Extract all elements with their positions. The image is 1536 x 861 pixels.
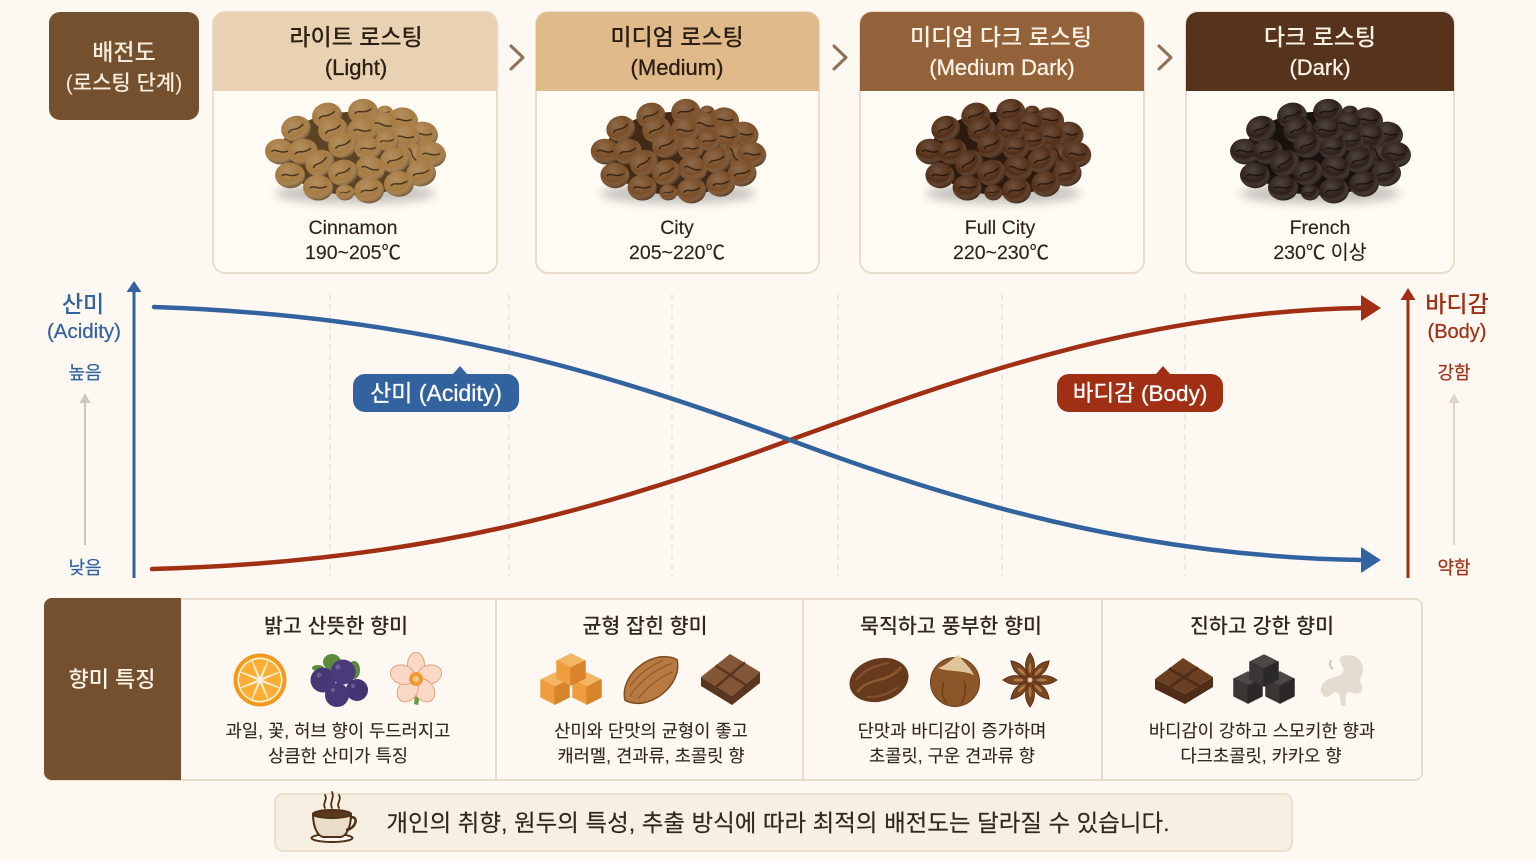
beans: light bbox=[263, 98, 448, 205]
icon: almond bbox=[614, 645, 688, 715]
row label: roasting stage bbox=[49, 12, 199, 120]
left axis: acidity: 산미 bbox=[62, 291, 104, 317]
flavor column 3: 단맛과 바디감이 증가하며 bbox=[858, 721, 1046, 741]
card: dark roast: (Dark) bbox=[1289, 55, 1351, 80]
card: medium dark roast: 220~230℃ bbox=[953, 242, 1049, 264]
flavor column 2: 산미와 단맛의 균형이 좋고 bbox=[554, 721, 748, 741]
icon: dark cubes bbox=[1234, 655, 1294, 703]
card: medium dark roast: (Medium Dark) bbox=[929, 55, 1075, 80]
beans: medium dark bbox=[914, 98, 1093, 205]
right axis: body bbox=[1400, 288, 1489, 578]
flavor column 2 bbox=[541, 615, 760, 766]
right axis: body: (Body) bbox=[1428, 321, 1486, 343]
flavor column 3 bbox=[844, 615, 1057, 766]
icon: hazelnut bbox=[930, 655, 980, 706]
callout: acidity bbox=[353, 366, 519, 412]
card: dark roast: French bbox=[1290, 217, 1350, 239]
row label: roasting stage: (로스팅 단계) bbox=[66, 72, 182, 95]
card: medium roast: (Medium) bbox=[631, 55, 723, 80]
card: dark roast: 다크 로스팅 bbox=[1264, 24, 1376, 50]
card: medium dark roast: 미디엄 다크 로스팅 bbox=[910, 24, 1092, 50]
callout: acidity: 산미 (Acidity) bbox=[370, 380, 502, 406]
flavor column 3: 초콜릿, 구운 견과류 향 bbox=[869, 746, 1035, 766]
flavor column 2: 캐러멜, 견과류, 초콜릿 향 bbox=[557, 746, 745, 766]
callout: body bbox=[1057, 366, 1223, 412]
flavor column 1: 과일, 꽃, 허브 향이 두드러지고 bbox=[226, 721, 450, 741]
icon: roasted bean bbox=[844, 651, 914, 709]
card: medium dark roast bbox=[860, 12, 1144, 273]
flavor column 4: 바디감이 강하고 스모키한 향과 bbox=[1149, 721, 1375, 741]
callout: body: 바디감 (Body) bbox=[1073, 381, 1207, 406]
icon: flower bbox=[388, 652, 444, 706]
card: light roast: Cinnamon bbox=[309, 217, 397, 239]
icon: chocolate bar bbox=[701, 654, 760, 705]
left axis: acidity: 낮음 bbox=[68, 558, 102, 578]
chevron 2 bbox=[834, 46, 846, 69]
flavor column 1: 상큼한 산미가 특징 bbox=[268, 746, 408, 766]
chevron 1 bbox=[511, 46, 523, 69]
footer note: 개인의 취향, 원두의 특성, 추출 방식에 따라 최적의 배전도는 달라질 수 있습니다. bbox=[386, 810, 1170, 836]
flavor column 4 bbox=[1149, 615, 1375, 766]
flavor column 4: 다크초콜릿, 카카오 향 bbox=[1180, 746, 1342, 766]
right axis: body: 바디감 bbox=[1425, 291, 1489, 317]
panel: flavor characteristics: 향미 특징 bbox=[68, 667, 156, 692]
icon: blueberries bbox=[310, 654, 368, 707]
flavor column 1 bbox=[226, 615, 450, 766]
body curve bbox=[152, 295, 1381, 569]
chevron 3 bbox=[1159, 46, 1171, 69]
icon: coffee cup bbox=[312, 792, 356, 842]
card: medium dark roast: Full City bbox=[965, 217, 1035, 239]
flavor column 4: 진하고 강한 향미 bbox=[1190, 615, 1334, 638]
flavor column 3: 묵직하고 풍부한 향미 bbox=[860, 615, 1042, 638]
card: light roast: 190~205℃ bbox=[305, 242, 401, 264]
beans: dark bbox=[1228, 98, 1413, 205]
right axis: body: 강함 bbox=[1437, 363, 1471, 383]
icon: orange slice bbox=[234, 654, 286, 706]
card: light roast: (Light) bbox=[325, 55, 387, 80]
flavor column 1: 밝고 산뜻한 향미 bbox=[264, 615, 408, 638]
card: dark roast bbox=[1186, 12, 1454, 273]
footer note bbox=[275, 792, 1292, 851]
beans: medium bbox=[589, 98, 768, 205]
icon: dark chocolate bbox=[1155, 658, 1213, 704]
card: medium roast bbox=[536, 12, 819, 273]
card: dark roast: 230℃ 이상 bbox=[1273, 242, 1367, 264]
card: light roast: 라이트 로스팅 bbox=[289, 24, 423, 50]
flavor column 2: 균형 잡힌 향미 bbox=[582, 615, 708, 638]
left axis: acidity: (Acidity) bbox=[47, 320, 121, 343]
acidity curve bbox=[154, 307, 1381, 573]
card: medium roast: 205~220℃ bbox=[629, 242, 725, 264]
icon: caramel cubes bbox=[541, 654, 601, 704]
left axis: acidity: 높음 bbox=[68, 363, 102, 383]
left axis: acidity bbox=[47, 281, 142, 578]
icon: star anise bbox=[1003, 653, 1057, 707]
row label: roasting stage: 배전도 bbox=[92, 39, 156, 65]
card: medium roast: 미디엄 로스팅 bbox=[610, 24, 744, 50]
card: light roast bbox=[213, 12, 497, 273]
card: medium roast: City bbox=[660, 217, 694, 239]
right axis: body: 약함 bbox=[1437, 558, 1471, 578]
icon: smoke bbox=[1321, 655, 1363, 706]
panel: flavor characteristics bbox=[44, 598, 1422, 780]
